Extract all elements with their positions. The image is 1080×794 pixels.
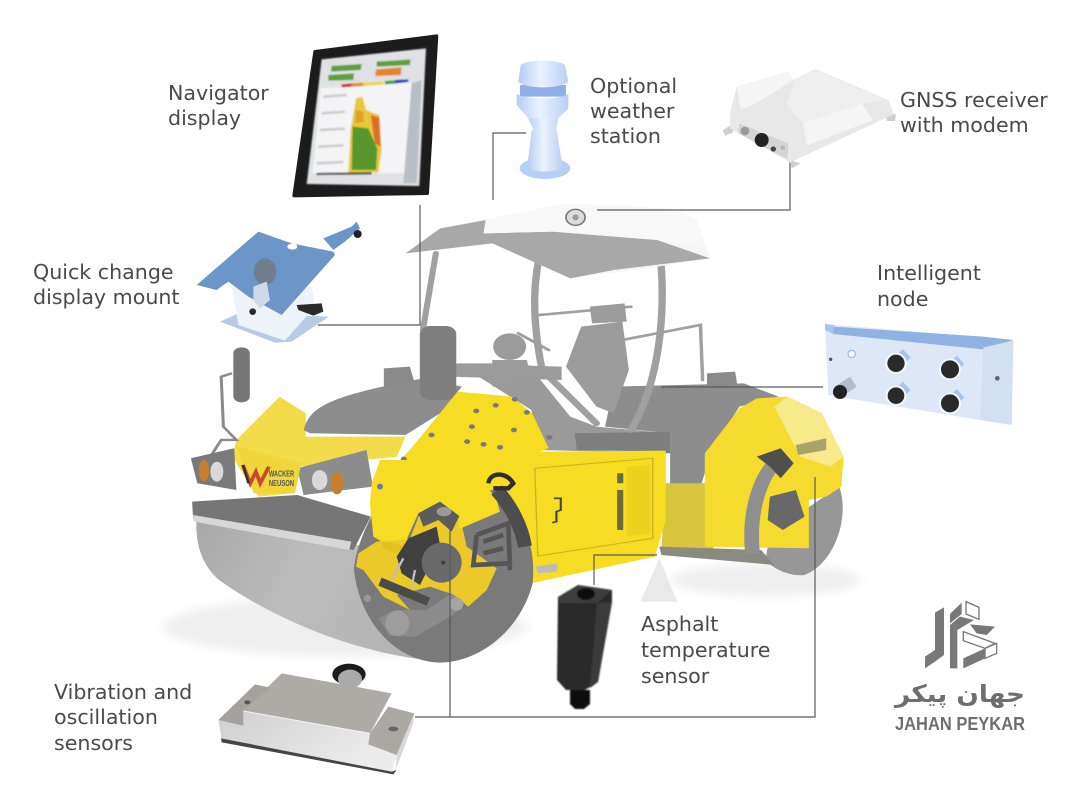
logo mark <box>925 602 997 668</box>
rear yellow fender <box>705 397 844 548</box>
logo Persian name: جهان پیکر <box>894 680 1025 708</box>
label: GNSS receiver: with modem <box>900 113 1029 137</box>
label: vibration sensors: sensors <box>54 731 133 755</box>
seat and steering <box>449 303 629 413</box>
cab posts <box>423 230 703 430</box>
brand name: WACKER <box>269 470 294 478</box>
label: vibration sensors: Vibration and <box>54 680 192 704</box>
label: weather station: weather <box>590 99 675 123</box>
front wheel and suspension <box>354 460 533 663</box>
headlights <box>191 448 236 490</box>
yellow side panel <box>371 392 666 583</box>
label: asphalt temperature sensor: temperature <box>641 638 770 662</box>
bracket <box>473 523 510 570</box>
label: vibration sensors: oscillation <box>54 705 158 729</box>
yellow panel lower edge <box>370 460 500 542</box>
label: navigator display: Navigator <box>168 81 269 105</box>
label: quick change mount: display mount <box>33 285 180 309</box>
central body <box>458 363 670 453</box>
brand plate <box>236 447 301 493</box>
rear hub and hose <box>752 457 783 553</box>
connectors <box>886 353 961 413</box>
hydraulic hose <box>497 490 525 547</box>
roof <box>406 203 710 278</box>
front bumper <box>192 495 371 550</box>
body bolts <box>401 397 553 461</box>
icon: quick change display mount <box>197 222 362 343</box>
front grey hood <box>304 378 462 435</box>
tablet screen <box>307 48 426 186</box>
label: quick change mount: Quick change <box>33 260 174 284</box>
icon: navigator tablet <box>294 36 437 196</box>
suspension hatch <box>418 502 459 532</box>
label: GNSS receiver: GNSS receiver <box>900 88 1048 112</box>
label: intelligent node: Intelligent <box>877 261 981 285</box>
front yellow hood <box>232 397 406 497</box>
piston <box>380 582 428 602</box>
door panel <box>535 458 653 556</box>
under frame <box>661 483 713 550</box>
label: weather station: Optional <box>590 74 677 98</box>
connector lines <box>318 133 823 717</box>
logo Latin name: JAHAN PEYKAR <box>895 714 1025 734</box>
icon: asphalt temperature sensor <box>557 585 612 709</box>
roof antenna <box>566 209 585 225</box>
inner yellow casting <box>356 502 497 610</box>
label: navigator display: display <box>168 106 241 130</box>
swing arm <box>378 593 465 637</box>
label: asphalt temperature sensor: sensor <box>641 664 710 688</box>
label: weather station: station <box>590 124 661 148</box>
icon: weather station <box>517 60 570 179</box>
road roller machine <box>163 203 861 663</box>
rear hood <box>605 383 779 487</box>
label: intelligent node: node <box>877 287 928 311</box>
logo: Jahan Peykar <box>894 602 1025 734</box>
mirrors <box>233 347 250 402</box>
front skirt triangle <box>641 558 677 602</box>
icon: vibration sensor <box>218 664 414 774</box>
road roller machine: NEUSON <box>269 479 294 488</box>
ground shadow <box>163 563 861 657</box>
wheel rim <box>354 490 533 663</box>
icon: intelligent node <box>825 324 1013 425</box>
front drum <box>196 517 445 662</box>
rear drum <box>765 487 843 575</box>
drive hub <box>397 527 440 585</box>
label: asphalt temperature sensor: Asphalt <box>641 612 718 636</box>
icon: GNSS receiver <box>723 69 896 168</box>
